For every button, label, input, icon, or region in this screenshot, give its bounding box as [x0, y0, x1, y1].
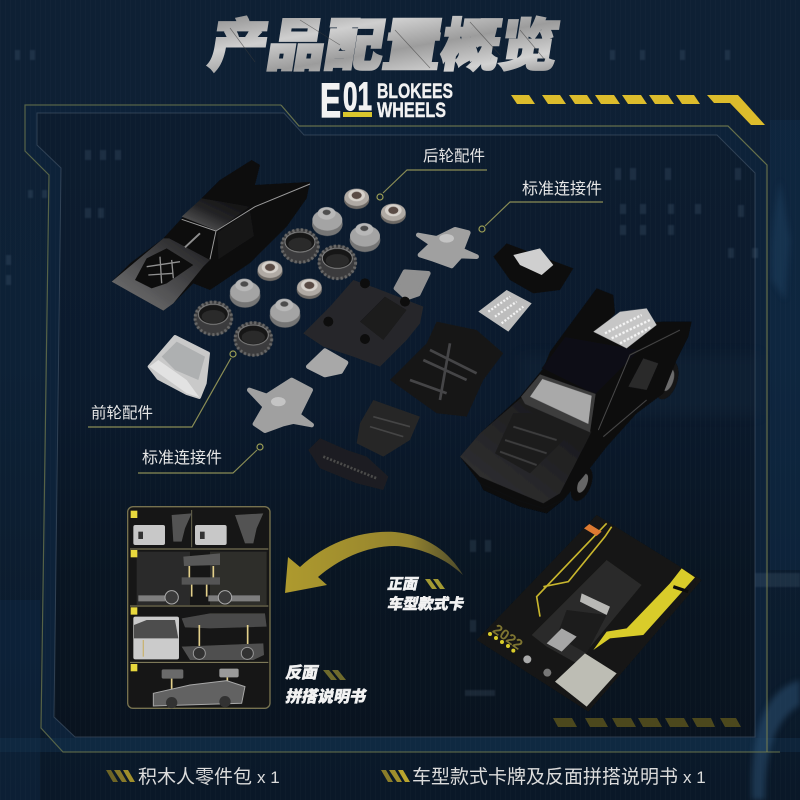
logo: E01 Blokees Wheels: BLOKEES: [377, 80, 453, 103]
dim dashes bottom: [553, 718, 741, 727]
caption: front card: 正面: [386, 576, 420, 593]
model card: [477, 515, 702, 712]
model card: 2022: [489, 622, 525, 654]
exploded parts: connectors: [249, 229, 477, 431]
caption: back instructions: 拼搭说明书: [284, 687, 368, 706]
logo: E01 Blokees Wheels: 01: [343, 75, 372, 119]
label: rear wheel parts: 后轮配件: [423, 147, 485, 165]
yellow dashes top right: [511, 95, 765, 125]
exploded parts: engine pieces: [478, 243, 573, 332]
logo: E01 Blokees Wheels: WHEELS: [377, 99, 446, 122]
label: standard connector upper: [479, 180, 603, 232]
label: front wheel parts: 前轮配件: [91, 404, 153, 422]
caption: front card: [386, 576, 466, 613]
logo: E01 Blokees Wheels: [320, 75, 453, 128]
bottom caption left: 积木人零件包 x 1: [138, 766, 280, 788]
caption: back instructions: 反面: [284, 663, 320, 682]
instruction card: [128, 507, 270, 708]
assembled car: [460, 288, 692, 513]
caption: front card: 车型款式卡: [386, 595, 466, 613]
exploded parts: chassis: [303, 278, 503, 490]
exploded parts: transparent case: [149, 337, 208, 397]
exploded parts: rear body shell: [112, 160, 310, 311]
bottom caption right: 车型款式卡牌及反面拼搭说明书 x 1: [412, 766, 706, 788]
label: rear wheel parts: [377, 147, 487, 200]
label: front wheel parts: [88, 351, 236, 427]
label: standard connector lower: [138, 444, 263, 473]
frame lines: [25, 105, 780, 752]
logo: E01 Blokees Wheels: E: [320, 75, 341, 128]
exploded parts: wheels: [194, 189, 406, 356]
curved arrow: [285, 532, 463, 593]
title: 产品配置概览: [205, 14, 563, 77]
label: standard connector upper: 标准连接件: [522, 180, 602, 198]
label: standard connector lower: 标准连接件: [142, 449, 222, 467]
caption: back instructions: [284, 663, 368, 706]
